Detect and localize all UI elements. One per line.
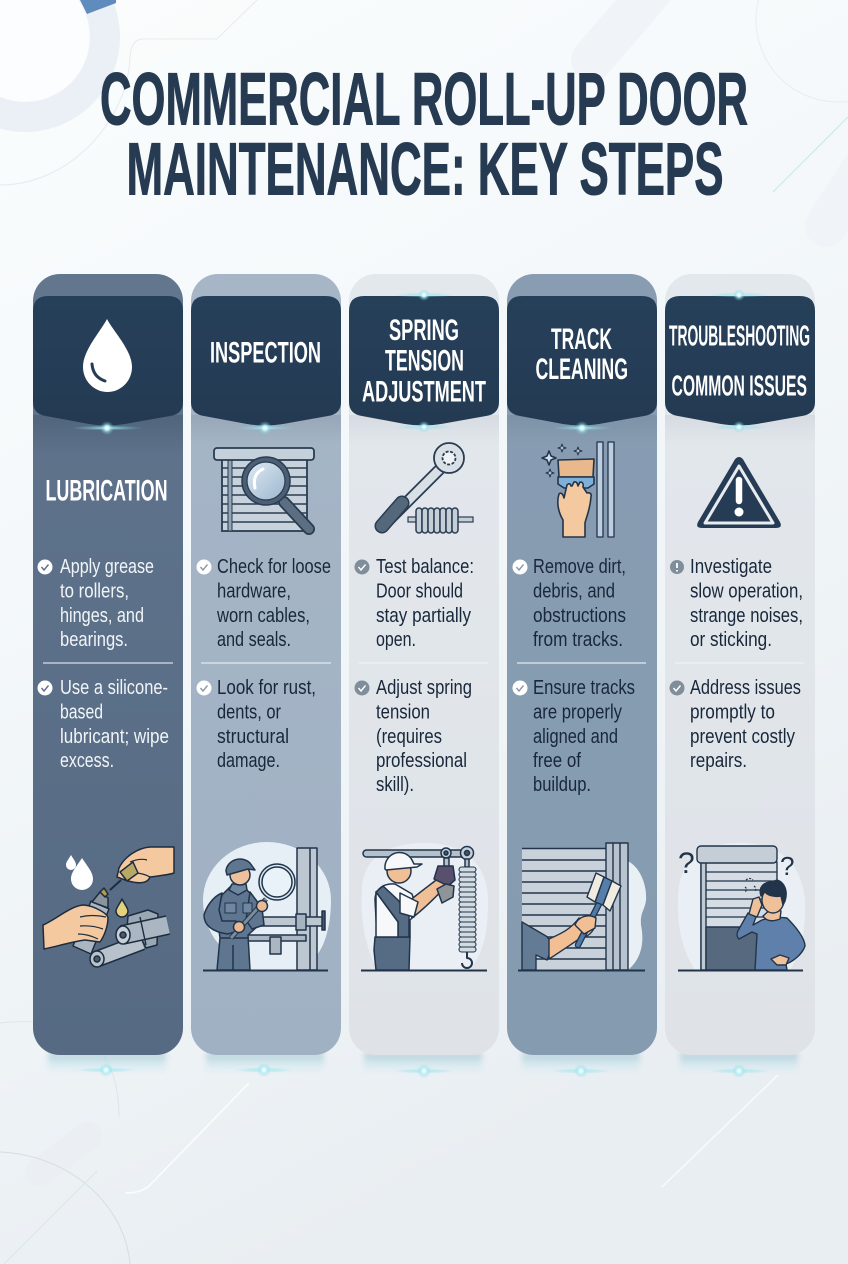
bullet icon 1 — [512, 560, 528, 574]
bullet text 2: skill). — [376, 774, 414, 796]
bullet text 2: free of — [533, 750, 581, 772]
illustration: arm brushing door track — [518, 843, 646, 970]
illustration: confused person by stuck door: ? — [678, 847, 695, 880]
bullet text 1: worn cables, — [216, 605, 310, 627]
heading: track cleaning — [536, 323, 628, 386]
bullet text 1 — [216, 556, 331, 651]
icon: wrench and spring — [382, 443, 473, 533]
panel body — [349, 274, 499, 1055]
bullet text 1: from tracks. — [533, 629, 623, 651]
bullet icon 2 — [512, 680, 528, 696]
panel: troubleshooting common issues — [665, 274, 815, 1078]
icon: warning triangle — [697, 457, 781, 528]
heading: spring tension adjustment: SPRING — [389, 314, 459, 347]
bullet icon 1 — [354, 560, 370, 574]
panel body — [665, 274, 815, 1055]
bullet text 1: slow operation, — [690, 580, 803, 602]
heading: troubleshooting common issues — [669, 320, 810, 402]
shade below header — [507, 415, 657, 445]
bullet text 1: hardware, — [217, 580, 291, 602]
bullet text 1 — [60, 556, 154, 651]
bullet text 2: structural — [217, 726, 289, 748]
icon: door with magnifying glass — [214, 448, 314, 531]
panel shadow and glow — [364, 1053, 482, 1078]
panel shadow and glow — [522, 1053, 640, 1078]
panel: inspection — [191, 274, 341, 1077]
bullet text 2: damage. — [217, 750, 280, 772]
bullet text 1: Door should — [376, 580, 463, 602]
bullet text 2: excess. — [60, 750, 114, 772]
bullet text 2: buildup. — [533, 774, 591, 796]
bullet text 2: Address issues — [690, 677, 801, 699]
bullet text 2: Adjust spring — [376, 677, 472, 699]
bullet text 1: and seals. — [217, 629, 291, 651]
panel shadow and glow — [206, 1053, 324, 1077]
heading: spring tension adjustment: ADJUSTMENT — [362, 376, 486, 408]
bullet text 2: prevent costly — [690, 726, 795, 748]
header glow — [552, 421, 612, 435]
bullet text 1: Remove dirt, — [533, 556, 626, 578]
header glows — [709, 289, 769, 433]
bullet text 2: Look for rust, — [217, 677, 316, 699]
panel shadow and glow — [48, 1053, 166, 1077]
bullet icon 2 — [196, 680, 212, 696]
bullet text 2: are properly — [533, 702, 622, 724]
bullet text 2 — [376, 677, 472, 796]
title — [100, 58, 748, 210]
bullet text 1: bearings. — [60, 629, 128, 651]
heading: spring tension adjustment — [362, 314, 486, 408]
bullet text 1 — [376, 556, 474, 651]
bullet text 1: open. — [376, 629, 416, 651]
heading: track cleaning: CLEANING — [536, 353, 628, 386]
bullet text 2: based — [60, 702, 103, 724]
bullet text 2: lubricant; wipe — [60, 726, 169, 748]
panel body — [507, 274, 657, 1055]
header banner — [33, 296, 183, 426]
bullet text 1: to rollers, — [60, 580, 129, 602]
bullet text 2 — [217, 677, 316, 772]
heading: lubrication: LUBRICATION — [46, 474, 168, 508]
bullet text 1: strange noises, — [690, 605, 803, 627]
header banner — [191, 296, 341, 426]
bullet text 1 — [533, 556, 626, 651]
bullet text 2 — [690, 677, 801, 772]
bullet text 2: Use a silicone- — [60, 677, 168, 699]
heading: spring tension adjustment: TENSION — [385, 344, 464, 378]
shade below header — [33, 415, 183, 455]
icon: water drop — [83, 319, 132, 392]
bullet text 1: Apply grease — [60, 556, 154, 578]
heading: inspection: INSPECTION — [210, 336, 321, 370]
bullet text 2: repairs. — [690, 750, 747, 772]
bullet text 1: Check for loose — [217, 556, 331, 578]
icon: brush, hand and track rails — [542, 442, 614, 537]
header glows — [394, 289, 454, 433]
illustration: technician adjusting spring — [361, 843, 488, 970]
bullet text 1: Test balance: — [376, 556, 474, 578]
bullet icon 2 — [38, 680, 52, 696]
header glow — [71, 421, 143, 435]
shade below header — [349, 415, 499, 445]
bullet text 1: Investigate — [690, 556, 772, 578]
illustration: technician inspecting hardware — [203, 842, 331, 970]
bullet text 2: dents, or — [217, 702, 281, 724]
illustration: confused person by stuck door — [678, 843, 805, 970]
bullet text 2 — [533, 677, 635, 796]
bullet text 2: aligned and — [533, 726, 618, 748]
bullet text 1: hinges, and — [60, 605, 144, 627]
bullet text 2: (requires — [376, 726, 442, 748]
panel shadow and glow — [680, 1053, 798, 1078]
header banner — [665, 296, 815, 426]
panel: track cleaning — [507, 274, 657, 1078]
bullet text 2: Ensure tracks — [533, 677, 635, 699]
header banner — [349, 296, 499, 426]
panel body — [33, 274, 183, 1055]
bullet text 1: or sticking. — [690, 629, 772, 651]
shade below header — [665, 415, 815, 445]
panel: spring tension adjustment — [349, 274, 499, 1078]
bullet text 2 — [60, 677, 169, 772]
bullet icon 1 — [196, 560, 212, 574]
bullet text 1: obstructions — [533, 605, 626, 627]
shade below header — [191, 415, 341, 445]
header glow — [235, 421, 295, 435]
bullet icon 2 — [670, 680, 684, 696]
bullet text 2: promptly to — [690, 702, 775, 724]
bullet text 2: tension — [376, 702, 430, 724]
heading: track cleaning: TRACK — [551, 323, 612, 356]
illustration: confused person by stuck door: ? — [780, 851, 794, 881]
illustration: hands lubricating a roller — [43, 847, 174, 967]
bullet text 1: stay partially — [376, 605, 471, 627]
bullet text 2: professional — [376, 750, 467, 772]
bullet text 1 — [690, 556, 803, 651]
bullet icon 2 — [354, 680, 370, 696]
bullet icon 1 — [670, 560, 684, 574]
bullet text 1: debris, and — [533, 580, 615, 602]
bullet icon 1 — [38, 560, 52, 574]
panel body — [191, 274, 341, 1055]
header banner — [507, 296, 657, 426]
panel: lubrication — [33, 274, 183, 1077]
